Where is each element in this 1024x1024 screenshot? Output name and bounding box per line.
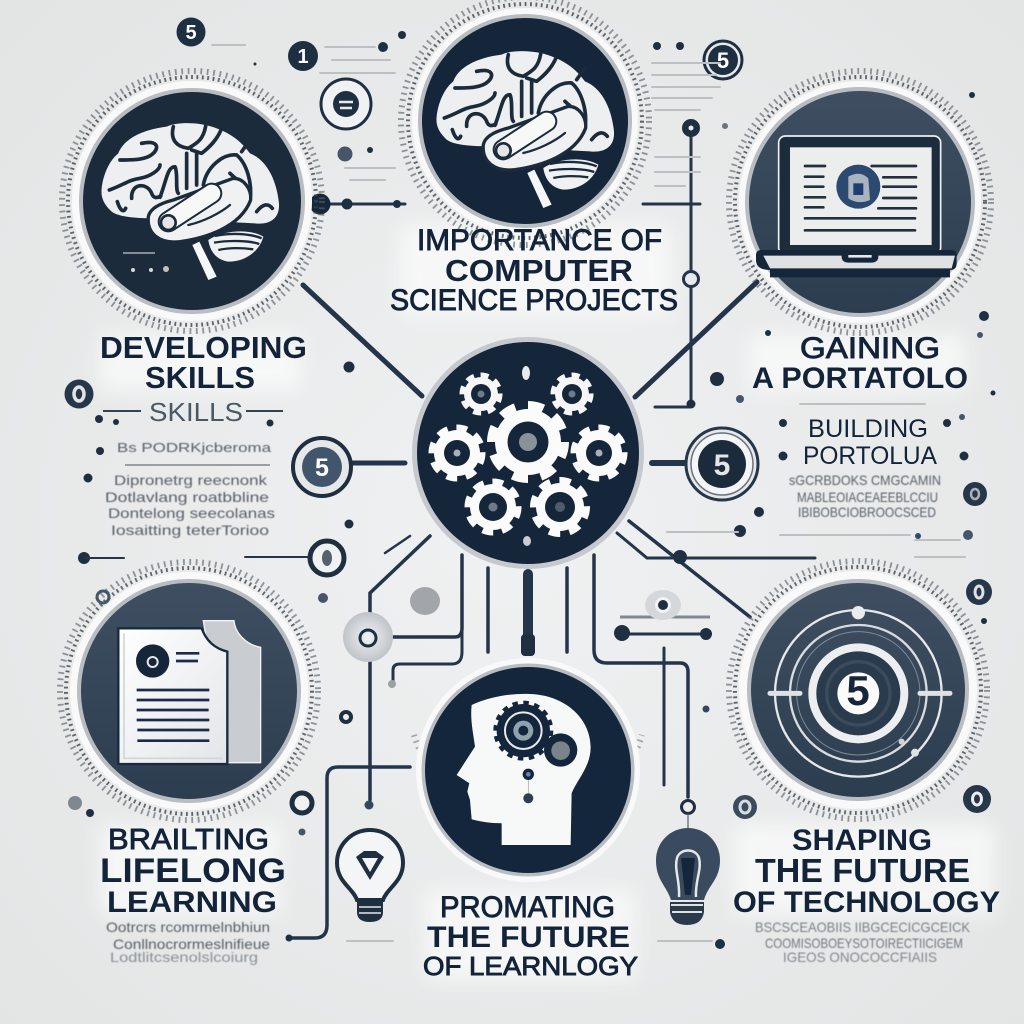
text block: building portfolio: MABLEOIACEAEEBLCCIU: [797, 489, 938, 505]
icon: laptop: [756, 136, 957, 277]
badge: top right 5: 5: [717, 48, 729, 73]
panel: importance brain circle: [401, 0, 649, 245]
title: COMPUTER: [445, 253, 633, 288]
text block: building portfolio: BUILDING: [808, 415, 928, 443]
icon: head silhouette with gears: [457, 694, 591, 845]
number 5: 5: [846, 667, 870, 714]
icon: brain: [101, 123, 279, 280]
heading: lifelong learning: LIFELONG: [100, 852, 286, 890]
heading: lifelong learning: LEARNING: [107, 886, 277, 919]
heading: shaping the future: [733, 824, 1000, 919]
heading: promoting the future: THE FUTURE: [427, 921, 630, 954]
heading: lifelong learning: [100, 824, 286, 919]
heading: gaining a portfolio: GAINING: [800, 332, 940, 365]
heading: developing skills: [100, 330, 307, 395]
text block: shaping detail: [755, 919, 971, 965]
badge: top left 5: 5: [185, 22, 197, 44]
icon: brain: [436, 51, 614, 208]
tiny caption marks: [123, 253, 169, 272]
panel: developing skills brain circle: [62, 71, 322, 331]
connector: right horizontal stub: [652, 460, 686, 466]
text block: building portfolio: [789, 415, 941, 520]
node: right ring with 5: [686, 428, 758, 500]
connector: thin vertical: [662, 648, 666, 785]
node: grey ring on left route: [343, 612, 393, 662]
badge: top left 5: [176, 18, 206, 46]
faint decorative lines: [84, 45, 965, 941]
icon: right gear: [575, 429, 623, 477]
heading: gaining a portfolio: [752, 332, 968, 395]
text block: lifelong detail: Lodtlitcsenolslcoiurg: [110, 949, 258, 965]
connector: left horizontal stub: [352, 460, 405, 466]
text block: skills detail: SKILLS: [149, 397, 243, 427]
text block: skills detail: [103, 397, 283, 538]
text block: skills detail: Dontelong seecolanas: [108, 505, 275, 521]
panel: central gears hub: [412, 337, 644, 569]
blob: grey smudge: [410, 587, 440, 615]
icon: small drop top: [522, 366, 530, 380]
icon: top left gear: [463, 376, 499, 412]
connector: thick diagonal right: [635, 282, 757, 397]
badges: small zero circles: [64, 380, 992, 819]
node row with grey bar: [614, 617, 712, 641]
text block: lifelong detail: Conllnocrormeslnifieue: [113, 936, 270, 952]
title: IMPORTANCE OF: [417, 224, 662, 257]
connector: top left node line: [310, 194, 405, 214]
text block: shaping detail: IGEOS ONOCOCCFIAIIS: [783, 949, 937, 965]
text block: skills detail: Dipronetrg reecnonk: [114, 472, 268, 488]
icon: bottom left gear: [469, 483, 517, 531]
connector: thick diagonal left: [303, 285, 422, 396]
heading: shaping the future: THE FUTURE: [755, 852, 970, 889]
icon: left gear: [433, 429, 481, 477]
connector: route to right bulb: [594, 555, 688, 797]
icon: face ring: [321, 79, 371, 129]
badge: top 1: 1: [297, 46, 309, 68]
heading: promoting the future: [423, 891, 638, 981]
node: left ring with S: [293, 438, 351, 496]
heading: shaping the future: SHAPING: [792, 824, 932, 857]
text block: lifelong detail: [106, 919, 270, 965]
icon: left light bulb: [337, 830, 403, 922]
icon: bottom right gear: [535, 482, 585, 532]
text block: shaping detail: COOMISOBOEYSOTOIRECTIICIGEM: [765, 935, 963, 951]
text block: shaping detail: BSCSCEAOBIIS IIBGCECICGCEICK: [755, 919, 971, 935]
icon: document: [118, 621, 261, 764]
panel: laptop circle: [729, 71, 991, 333]
text block: lifelong detail: Ootrcrs rcomrmelnbhiun: [106, 919, 270, 935]
panel: document circle: [60, 562, 318, 820]
connector: lower left routes: [370, 536, 462, 800]
text block: building portfolio: PORTOLUA: [803, 442, 937, 470]
background glow behind titles: [100, 225, 995, 980]
icon: small drop bottom: [523, 536, 531, 546]
connector: vertical lines under hub: [488, 568, 567, 656]
text block: building portfolio: sGCRBDOKS CMGCAMIN: [789, 472, 941, 488]
icon: top right gear: [554, 376, 590, 412]
heading: promoting the future: OF LEARNLOGY: [423, 951, 638, 981]
text block: building portfolio: IBIBOBCIOBROOCSCED: [798, 504, 936, 520]
text block: skills detail: Bs PODRKjcberoma: [117, 440, 272, 455]
icon: small eye node: [645, 590, 681, 620]
badge: top 1: [288, 41, 318, 71]
connector: route to left bulb area: [286, 767, 410, 942]
node: left ring with S: 5: [315, 454, 329, 482]
icon: concentric rings: [770, 606, 950, 777]
panel: head with gears circle: [414, 658, 642, 882]
heading: developing skills: SKILLS: [145, 360, 255, 395]
connector: right vertical with nodes: [643, 119, 700, 408]
panel: rings with number circle: [729, 561, 987, 819]
node: right ring with 5: 5: [714, 449, 730, 482]
title: SCIENCE PROJECTS: [390, 284, 678, 317]
heading: lifelong learning: BRAILTING: [108, 824, 269, 856]
text block: skills detail: Dotlavlang roatbbline: [105, 489, 269, 505]
title: [390, 224, 678, 317]
heading: gaining a portfolio: A PORTATOLO: [752, 362, 968, 395]
icon: right light bulb: [656, 800, 720, 925]
text block: skills detail: Iosaitting teterTorioo: [111, 522, 269, 538]
heading: promoting the future: PROMATING: [440, 891, 615, 924]
heading: developing skills: DEVELOPING: [100, 330, 307, 365]
heading: shaping the future: OF TECHNOLOGY: [733, 886, 1000, 919]
badge: top right 5: [704, 41, 742, 79]
icon: large gear: [493, 407, 563, 477]
connector: lower right diagonals: [617, 521, 815, 617]
connector network: [286, 119, 815, 942]
